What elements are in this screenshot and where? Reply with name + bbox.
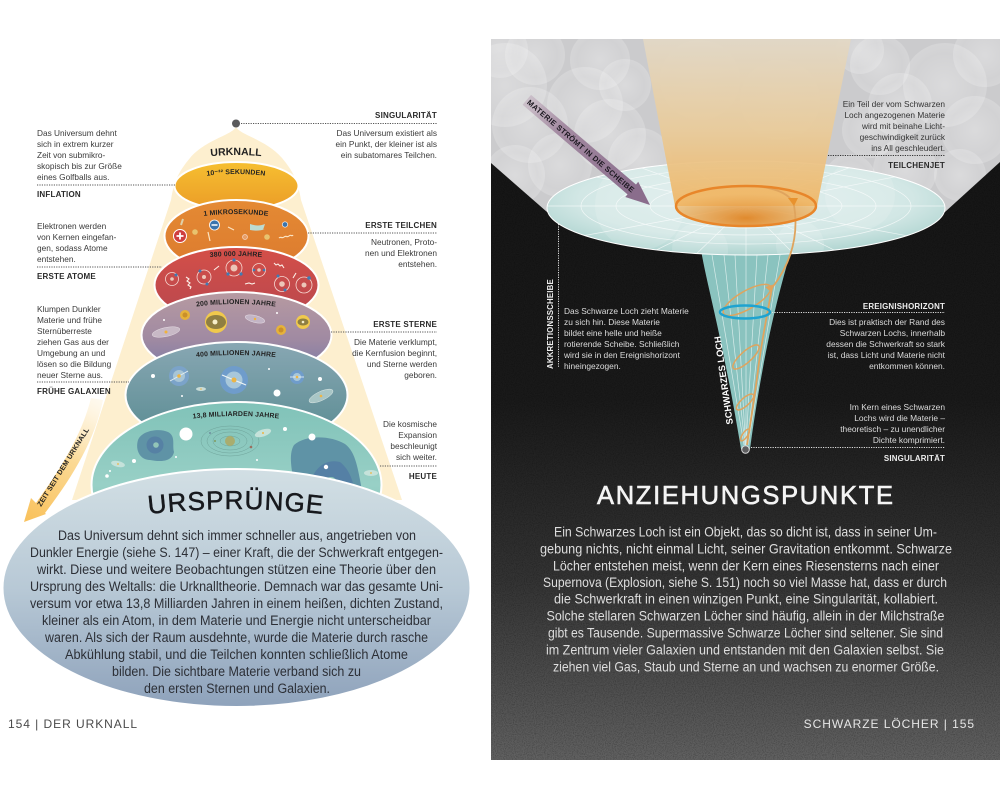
callout: Ereignishorizont: dessen die Schwerkraft so stark: [826, 339, 946, 349]
layer: 380 000 years: [154, 246, 320, 306]
particle jet: [643, 39, 851, 226]
callout: Akkretionsscheibe: [546, 224, 689, 371]
body text: Anziehungspunkte: Solche stellaren Schwarzen Löcher sind häufig, allein in der Milchstraße: [546, 608, 944, 624]
callout: Inflation: Zeit von submikro-: [37, 150, 105, 160]
callout: Erste Teilchen: entstehen.: [398, 259, 437, 269]
orbit: infalling matter spiral: [719, 186, 798, 445]
body text: Anziehungspunkte: Löcher entstehen meist, wenn der Kern eines Riesensterns nach einer: [553, 558, 939, 574]
callout: Singularität, black hole: SINGULARITÄT: [884, 454, 945, 463]
body text: Anziehungspunkte: die Schwerkraft in einen winzigen Punkt, eine Singularität, kollabiert.: [554, 592, 938, 606]
callout: Frühe Galaxien: Klumpen Dunkler: [37, 304, 101, 314]
callout: Inflation: INFLATION: [37, 190, 81, 199]
heading: Urknall: URKNALL: [210, 148, 262, 156]
callout: Inflation: Das Universum dehnt: [37, 128, 117, 138]
cone: expanding universe: [72, 127, 402, 500]
callout: Singularität: ein Punkt, der kleiner ist als: [336, 139, 437, 149]
callout: Singularität: Das Universum existiert als: [336, 128, 437, 138]
callout: Erste Atome: [37, 221, 162, 281]
arrow: Zeit seit dem Urknall: ZEIT SEIT DEM URKNALL: [36, 426, 91, 508]
callout: Erste Teilchen: [308, 221, 437, 269]
callout: Teilchenjet: wird mit beinahe Licht-: [861, 121, 945, 131]
callout: Erste Sterne: und Sterne werden: [367, 359, 437, 369]
body text: Anziehungspunkte: Supernova (Explosion, siehe S. 151) noch so viel Masse hat, dass er durch: [543, 575, 947, 590]
callout: Erste Atome: gen, sodass Atome: [37, 243, 108, 253]
singularity dot: [232, 120, 240, 128]
callout: Erste Sterne: Die Materie verklumpt,: [354, 337, 437, 347]
page footer: Schwarze Löcher 155: SCHWARZE LÖCHER | 155: [804, 717, 975, 731]
light cone with gas clouds: [491, 39, 1000, 212]
callout: Akkretionsscheibe: Das Schwarze Loch zieht Materie: [564, 306, 689, 316]
callout: Teilchenjet: TEILCHENJET: [888, 161, 945, 170]
layer: 200 million years: [140, 291, 332, 358]
body text: Ursprünge: Dunkler Energie (siehe S. 147) – einer Kraft, die der Schwerkraft entgegen-: [30, 545, 443, 561]
callout: Inflation: [37, 128, 175, 199]
arrow: Materie strömt in die Scheibe: MATERIE STRÖMT IN DIE SCHEIBE: [525, 98, 636, 194]
callout: Akkretionsscheibe: zu sich hin. Diese Materie: [564, 317, 660, 327]
body text: Ursprünge: Das Universum dehnt sich immer schneller aus, angetrieben von: [58, 528, 416, 544]
callout: Singularität: SINGULARITÄT: [375, 111, 437, 120]
panel: title ellipse with body text: [4, 468, 470, 706]
callout: Teilchenjet: Loch angezogenen Materie: [844, 110, 945, 120]
body text: Ursprünge: waren. Als sich der Raum ausdehnte, wurde die Materie durch rasche: [44, 630, 428, 646]
body text: Anziehungspunkte: im Zentrum vieler Galaxien und entstanden mit den Galaxien selbst. Sie: [546, 642, 944, 658]
callout: Erste Sterne: die Kernfusion beginnt,: [352, 348, 437, 358]
layer: 10-32 seconds: 10⁻³² SEKUNDEN: [206, 169, 266, 176]
callout: Frühe Galaxien: FRÜHE GALAXIEN: [37, 387, 111, 396]
arrow: Zeit seit dem Urknall: [24, 398, 103, 522]
callout: Frühe Galaxien: neuer Sterne aus.: [37, 370, 103, 380]
callout: Erste Atome: ERSTE ATOME: [37, 272, 96, 281]
callout: Ereignishorizont: [772, 302, 946, 371]
layer: 10-32 seconds: [174, 161, 299, 205]
singularity point: [742, 446, 749, 453]
callout: Teilchenjet: ins All geschleudert.: [871, 143, 945, 153]
callout: Singularität, black hole: Dichte komprimiert.: [873, 435, 945, 445]
body text: Ursprünge: kleiner als ein Atom, in dem Materie und Energie nicht unterscheidbar: [42, 613, 431, 629]
body text: Anziehungspunkte: [540, 524, 952, 674]
funnel: black hole: [701, 250, 791, 449]
body text: Anziehungspunkte: gebung nichts, nicht einmal Licht, seiner Gravitation entkommt. Schwarze: [540, 542, 952, 556]
layer: 200 million years: 200 MILLIONEN JAHRE: [196, 299, 276, 306]
layer: 1 microsecond: 1 MIKROSEKUNDE: [204, 209, 268, 216]
callout: Frühe Galaxien: Sternüberreste: [37, 326, 92, 336]
body text: Ursprünge: wirkt. Diese und weitere Beobachtungen stützen eine Theorie über den: [36, 562, 436, 578]
callout: Akkretionsscheibe: hineingezogen.: [564, 361, 621, 371]
callout: Heute: [380, 419, 438, 481]
callout: Singularität: ein subatomares Teilchen.: [341, 150, 437, 160]
callout: Erste Teilchen: nen und Elektronen: [365, 248, 437, 258]
heading: Anziehungspunkte: ANZIEHUNGSPUNKTE: [597, 482, 893, 510]
body text: Anziehungspunkte: ziehen viel Gas, Staub und Sterne an und wachsen zu enormer Größe.: [553, 660, 939, 674]
arrow: Materie strömt in die Scheibe: [520, 92, 656, 213]
callout: Frühe Galaxien: ziehen Gas aus der: [37, 337, 109, 347]
body text: Ursprünge: den ersten Sternen und Galaxien.: [144, 681, 330, 697]
body text: Ursprünge: Ursprung des Weltalls: die Urknalltheorie. Demnach war das gesamte Uni-: [30, 579, 443, 595]
callout: Singularität, black hole: Im Kern eines Schwarzen: [850, 402, 945, 412]
callout: Ereignishorizont: EREIGNISHORIZONT: [863, 302, 945, 311]
callout: Ereignishorizont: entkommen können.: [869, 361, 945, 371]
callout: Teilchenjet: geschwindigkeit zurück: [860, 132, 946, 142]
callout: Singularität, black hole: Lochs wird die Materie –: [854, 413, 945, 423]
callout: Singularität, black hole: [751, 402, 945, 463]
body text: Ursprünge: versum vor etwa 13,8 Milliarden Jahren in einem heißen, dichten Zustand,: [30, 596, 443, 612]
layer: 380 000 years: 380 000 JAHRE: [210, 251, 262, 258]
callout: Erste Atome: von Kernen eingefan-: [37, 232, 117, 242]
layer: 400 million years: [124, 341, 348, 422]
body text: Anziehungspunkte: Ein Schwarzes Loch ist ein Objekt, das so dicht ist, dass in seiner Um-: [554, 524, 937, 540]
panel: left page, Der Urknall: [4, 111, 470, 731]
body text: Ursprünge: bilden. Die sichtbare Materie verband sich zu: [112, 664, 361, 680]
layer: 1 microsecond: [164, 199, 310, 258]
callout: Heute: Expansion: [398, 430, 437, 440]
callout: Teilchenjet: Ein Teil der vom Schwarzen: [843, 99, 945, 109]
callout: Ereignishorizont: Schwarzen Lochs, innerhalb: [840, 328, 945, 338]
callout: Heute: HEUTE: [409, 472, 437, 481]
ring: event horizon: [720, 306, 770, 318]
callout: Frühe Galaxien: [37, 304, 129, 396]
callout: Heute: sich weiter.: [396, 452, 437, 462]
callout: Singularität: [241, 111, 437, 160]
callout: Heute: Die kosmische: [383, 419, 437, 429]
callout: Akkretionsscheibe: wird sie in den Ereignishorizont: [563, 350, 681, 360]
callout: Akkretionsscheibe: rotierende Scheibe. Schließlich: [564, 339, 680, 349]
callout: Ereignishorizont: ist, dass Licht und Materie nicht: [828, 350, 946, 360]
callout: Frühe Galaxien: Umgebung an und: [37, 348, 106, 358]
panel: right page, Schwarze Löcher: [463, 22, 1000, 760]
callout: Erste Teilchen: Neutronen, Proto-: [371, 237, 437, 247]
page footer: 154 Der Urknall: 154 | DER URKNALL: [8, 717, 138, 731]
callout: Ereignishorizont: Dies ist praktisch der Rand des: [829, 317, 945, 327]
layer: 13.8 billion years: 13,8 MILLIARDEN JAHRE: [192, 411, 280, 419]
body text: Ursprünge: [30, 528, 443, 697]
callout: Inflation: eines Golfballs aus.: [37, 172, 109, 182]
body text: Ursprünge: Abkühlung stabil, und die Teilchen konnten schließlich Atome: [65, 647, 408, 663]
callout: Erste Sterne: [331, 320, 437, 380]
ring: disc inner edge: [676, 186, 816, 226]
callout: Erste Atome: entstehen.: [37, 254, 76, 264]
callout: Teilchenjet: [828, 99, 946, 170]
callout: Erste Sterne: ERSTE STERNE: [373, 320, 437, 329]
label: Schwarzes Loch: SCHWARZES LOCH: [713, 335, 735, 425]
callout: Frühe Galaxien: lösen so die Bildung: [37, 359, 112, 369]
accretion disc: [546, 164, 946, 256]
callout: Erste Teilchen: ERSTE TEILCHEN: [365, 221, 437, 230]
body text: Anziehungspunkte: gibt es Tausende. Supermassive Schwarze Löcher sind seltener. Sie sind: [548, 626, 943, 640]
layer: 13.8 billion years: [90, 401, 382, 494]
callout: Inflation: sich in extrem kurzer: [37, 139, 114, 149]
callout: Akkretionsscheibe: bildet eine helle und heiße: [564, 328, 662, 338]
callout: Akkretionsscheibe: AKKRETIONSSCHEIBE: [546, 279, 555, 369]
callout: Inflation: skopisch bis zur Größe: [37, 161, 122, 171]
layer: 400 million years: 400 MILLIONEN JAHRE: [196, 350, 276, 358]
callout: Frühe Galaxien: Materie und frühe: [37, 315, 102, 325]
callout: Erste Sterne: geboren.: [404, 370, 437, 380]
callout: Singularität, black hole: theoretisch – zu unendlicher: [840, 424, 945, 434]
heading: Ursprünge: URSPRÜNGE: [148, 487, 323, 514]
callout: Erste Atome: Elektronen werden: [37, 221, 107, 231]
callout: Heute: beschleunigt: [390, 441, 438, 451]
